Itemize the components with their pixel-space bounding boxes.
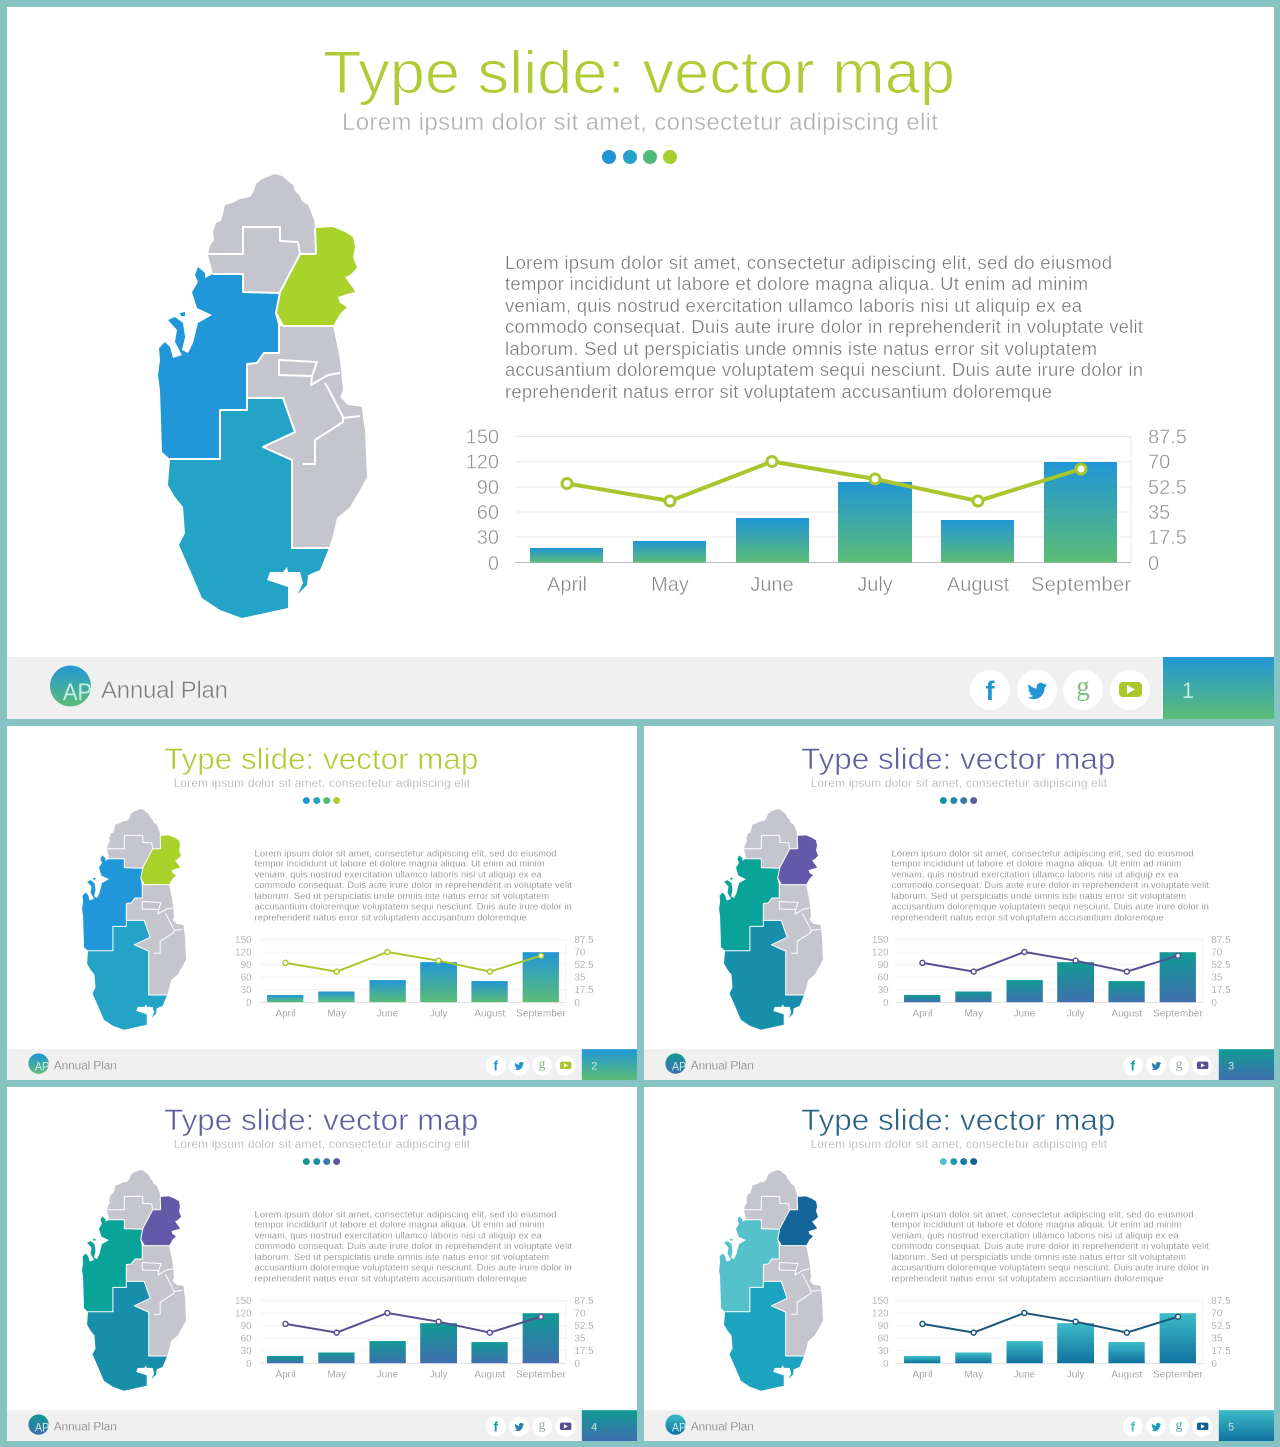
category labels: August xyxy=(474,1369,506,1380)
line markers xyxy=(562,456,1086,506)
combo chart xyxy=(235,1296,594,1380)
right axis labels: 0 xyxy=(574,998,580,1009)
body text: laborum. Sed ut perspiciatis unde omnis iste natus error sit voluptatem xyxy=(892,891,1186,901)
social icons: f xyxy=(1131,1420,1136,1435)
body text: reprehenderit natus error sit voluptatem accusantium doloremque xyxy=(892,912,1164,922)
right axis labels: 17.5 xyxy=(1211,1346,1231,1357)
page number box xyxy=(582,1410,637,1441)
category labels xyxy=(276,1008,567,1019)
left axis labels xyxy=(872,1296,889,1370)
category labels: April xyxy=(913,1008,932,1019)
map of Qatar xyxy=(719,809,823,1030)
category labels: September xyxy=(1153,1369,1204,1380)
right axis labels: 52.5 xyxy=(1211,1321,1231,1332)
right axis labels: 52.5 xyxy=(574,1321,594,1332)
left axis labels: 60 xyxy=(878,1334,889,1345)
category labels: May xyxy=(327,1369,346,1380)
category labels xyxy=(913,1008,1204,1019)
body text xyxy=(255,848,572,922)
category labels: September xyxy=(516,1008,567,1019)
left axis labels xyxy=(235,1296,252,1370)
right axis labels xyxy=(1148,426,1187,575)
subtitle: Lorem ipsum dolor sit amet, consectetur adipiscing elit xyxy=(811,776,1108,790)
page number box xyxy=(1219,1049,1274,1080)
social icons xyxy=(970,670,1150,710)
body text: veniam, quis nostrud exercitation ullamco laboris nisi ut aliquip ex ea xyxy=(255,1231,542,1241)
left axis labels: 90 xyxy=(241,960,252,971)
body text: Lorem ipsum dolor sit amet, consectetur adipiscing elit, sed do eiusmod xyxy=(255,1209,556,1219)
category labels: June xyxy=(1014,1008,1036,1019)
body text: commodo consequat. Duis aute irure dolor in reprehenderit in voluptate velit xyxy=(892,1241,1209,1251)
right axis labels xyxy=(574,1296,594,1370)
body text: commodo consequat. Duis aute irure dolor in reprehenderit in voluptate velit xyxy=(255,1241,572,1251)
dots xyxy=(303,797,340,804)
body text: accusantium doloremque voluptatem sequi nesciunt. Duis aute irure dolor in xyxy=(255,1262,572,1272)
line series xyxy=(567,462,1081,501)
right axis labels: 35 xyxy=(1211,1334,1223,1345)
left axis labels: 120 xyxy=(466,452,499,474)
brand name: Annual Plan xyxy=(691,1059,754,1073)
category labels xyxy=(276,1369,567,1380)
right axis labels: 0 xyxy=(1211,998,1217,1009)
body text: Lorem ipsum dolor sit amet, consectetur adipiscing elit, sed do eiusmod xyxy=(505,252,1112,273)
category labels: August xyxy=(947,574,1010,596)
social icons: g xyxy=(539,1417,546,1432)
category labels: May xyxy=(327,1008,346,1019)
page number box xyxy=(1163,657,1274,719)
left axis labels: 90 xyxy=(878,960,889,971)
body text: accusantium doloremque voluptatem sequi nesciunt. Duis aute irure dolor in xyxy=(892,901,1209,911)
left axis labels xyxy=(235,935,252,1009)
left axis labels: 150 xyxy=(466,426,499,448)
social icons: g xyxy=(539,1056,546,1071)
category labels xyxy=(913,1369,1204,1380)
right axis labels: 52.5 xyxy=(574,960,594,971)
title: Type slide: vector map xyxy=(801,743,1115,776)
right axis labels: 87.5 xyxy=(1148,426,1187,448)
body text: veniam, quis nostrud exercitation ullamco laboris nisi ut aliquip ex ea xyxy=(255,870,542,880)
footer bar xyxy=(7,1410,582,1441)
body text: reprehenderit natus error sit voluptatem accusantium doloremque xyxy=(255,912,527,922)
brand name: Annual Plan xyxy=(54,1059,117,1073)
right axis labels: 70 xyxy=(1211,1308,1223,1319)
page number box: 4 xyxy=(591,1422,597,1434)
social icons: g xyxy=(1176,1056,1183,1071)
left axis labels xyxy=(466,426,499,575)
category labels: May xyxy=(964,1008,983,1019)
social icons: f xyxy=(494,1059,499,1074)
left axis labels: 60 xyxy=(241,973,252,984)
right axis labels: 87.5 xyxy=(1211,1296,1231,1307)
social icons: f xyxy=(494,1420,499,1435)
left axis labels: 90 xyxy=(477,477,499,499)
right axis labels: 17.5 xyxy=(1148,527,1187,549)
social icons: g xyxy=(1076,671,1090,701)
subtitle: Lorem ipsum dolor sit amet, consectetur adipiscing elit xyxy=(811,1137,1108,1151)
bars xyxy=(904,952,1196,1002)
dots xyxy=(602,150,677,164)
right axis labels: 52.5 xyxy=(1148,477,1187,499)
left axis labels: 150 xyxy=(235,1296,252,1307)
line markers xyxy=(920,1310,1181,1335)
category labels: May xyxy=(964,1369,983,1380)
subtitle: Lorem ipsum dolor sit amet, consectetur adipiscing elit xyxy=(174,1137,471,1151)
logo xyxy=(28,1053,49,1074)
title: Type slide: vector map xyxy=(323,39,955,106)
right axis labels: 35 xyxy=(574,1334,586,1345)
body text: veniam, quis nostrud exercitation ullamco laboris nisi ut aliquip ex ea xyxy=(892,870,1179,880)
right axis labels: 70 xyxy=(1211,947,1223,958)
line markers xyxy=(283,949,544,974)
bars xyxy=(267,1313,559,1363)
map of Qatar xyxy=(82,1170,186,1391)
social icons: f xyxy=(1131,1059,1136,1074)
body text: veniam, quis nostrud exercitation ullamco laboris nisi ut aliquip ex ea xyxy=(505,295,1083,316)
line series xyxy=(922,952,1178,972)
map of Qatar xyxy=(82,809,186,1030)
category labels: July xyxy=(1067,1008,1084,1019)
right axis labels: 87.5 xyxy=(1211,935,1231,946)
left axis labels: 150 xyxy=(872,1296,889,1307)
bars xyxy=(904,1313,1196,1363)
page number box: 2 xyxy=(591,1061,597,1073)
combo chart xyxy=(466,426,1187,596)
category labels: May xyxy=(651,574,689,596)
body text: tempor incididunt ut labore et dolore magna aliqua. Ut enim ad minim xyxy=(255,1220,545,1230)
body text: commodo consequat. Duis aute irure dolor in reprehenderit in voluptate velit xyxy=(255,880,572,890)
title: Type slide: vector map xyxy=(801,1104,1115,1137)
right axis labels: 17.5 xyxy=(1211,985,1231,996)
footer bar xyxy=(644,1410,1219,1441)
body text: reprehenderit natus error sit voluptatem accusantium doloremque xyxy=(892,1273,1164,1283)
left axis labels: 0 xyxy=(883,1359,889,1370)
line markers xyxy=(920,949,1181,974)
bars xyxy=(530,462,1117,562)
left axis labels: 0 xyxy=(488,553,499,575)
dots xyxy=(940,797,977,804)
left axis labels: 120 xyxy=(872,947,889,958)
category labels: July xyxy=(430,1369,447,1380)
left axis labels: 30 xyxy=(477,527,499,549)
logo: AP xyxy=(672,1421,686,1435)
right axis labels: 70 xyxy=(1148,452,1170,474)
left axis labels: 150 xyxy=(872,935,889,946)
page number box xyxy=(582,1049,637,1080)
social icons xyxy=(486,1056,575,1076)
category labels: April xyxy=(276,1008,295,1019)
right axis labels: 0 xyxy=(1148,553,1159,575)
logo xyxy=(665,1414,686,1435)
body text: commodo consequat. Duis aute irure dolor in reprehenderit in voluptate velit xyxy=(892,880,1209,890)
line series xyxy=(922,1313,1178,1333)
body text: veniam, quis nostrud exercitation ullamco laboris nisi ut aliquip ex ea xyxy=(892,1231,1179,1241)
combo chart xyxy=(872,1296,1231,1380)
left axis labels: 150 xyxy=(235,935,252,946)
right axis labels: 17.5 xyxy=(574,1346,594,1357)
dots xyxy=(940,1158,977,1165)
category labels: April xyxy=(547,574,587,596)
category labels: September xyxy=(516,1369,567,1380)
category labels: September xyxy=(1031,574,1131,596)
category labels: June xyxy=(377,1008,399,1019)
body text: Lorem ipsum dolor sit amet, consectetur adipiscing elit, sed do eiusmod xyxy=(892,848,1193,858)
panel: slide 5 xyxy=(644,1087,1274,1441)
body text xyxy=(255,1209,572,1283)
left axis labels: 30 xyxy=(878,985,889,996)
logo: AP xyxy=(672,1060,686,1074)
right axis labels: 52.5 xyxy=(1211,960,1231,971)
right axis labels: 17.5 xyxy=(574,985,594,996)
body text: accusantium doloremque voluptatem sequi nesciunt. Duis aute irure dolor in xyxy=(255,901,572,911)
title: Type slide: vector map xyxy=(164,743,478,776)
left axis labels: 30 xyxy=(241,1346,252,1357)
panel: slide 1 xyxy=(7,7,1274,719)
right axis labels: 35 xyxy=(1211,973,1223,984)
left axis labels: 60 xyxy=(878,973,889,984)
page number box: 1 xyxy=(1182,678,1194,703)
category labels: August xyxy=(474,1008,506,1019)
body text: tempor incididunt ut labore et dolore magna aliqua. Ut enim ad minim xyxy=(892,1220,1182,1230)
body text xyxy=(892,1209,1209,1283)
left axis labels: 120 xyxy=(235,947,252,958)
body text: tempor incididunt ut labore et dolore magna aliqua. Ut enim ad minim xyxy=(505,273,1088,294)
logo xyxy=(28,1414,49,1435)
panel: slide 4 xyxy=(7,1087,637,1441)
body text: accusantium doloremque voluptatem sequi nesciunt. Duis aute irure dolor in xyxy=(505,359,1143,380)
page number box xyxy=(1219,1410,1274,1441)
body text xyxy=(892,848,1209,922)
category labels: August xyxy=(1111,1008,1143,1019)
category labels: June xyxy=(1014,1369,1036,1380)
left axis labels: 90 xyxy=(878,1321,889,1332)
right axis labels: 70 xyxy=(574,1308,586,1319)
right axis labels: 0 xyxy=(574,1359,580,1370)
right axis labels: 35 xyxy=(1148,502,1170,524)
line series xyxy=(285,952,541,972)
left axis labels: 60 xyxy=(477,502,499,524)
right axis labels xyxy=(574,935,594,1009)
logo xyxy=(50,666,92,706)
body text: laborum. Sed ut perspiciatis unde omnis iste natus error sit voluptatem xyxy=(255,891,549,901)
body text: reprehenderit natus error sit voluptatem accusantium doloremque xyxy=(505,381,1052,402)
body text: commodo consequat. Duis aute irure dolor in reprehenderit in voluptate velit xyxy=(505,316,1143,337)
social icons xyxy=(1123,1056,1212,1076)
right axis labels: 0 xyxy=(1211,1359,1217,1370)
logo xyxy=(665,1053,686,1074)
body text: laborum. Sed ut perspiciatis unde omnis iste natus error sit voluptatem xyxy=(505,338,1097,359)
left axis labels: 60 xyxy=(241,1334,252,1345)
map of Qatar xyxy=(158,174,367,618)
line markers xyxy=(283,1310,544,1335)
brand name: Annual Plan xyxy=(54,1420,117,1434)
body text: reprehenderit natus error sit voluptatem accusantium doloremque xyxy=(255,1273,527,1283)
right axis labels: 87.5 xyxy=(574,935,594,946)
title: Type slide: vector map xyxy=(164,1104,478,1137)
right axis labels: 35 xyxy=(574,973,586,984)
body text: tempor incididunt ut labore et dolore magna aliqua. Ut enim ad minim xyxy=(255,859,545,869)
left axis labels: 0 xyxy=(883,998,889,1009)
page number box: 3 xyxy=(1228,1061,1234,1073)
body text: laborum. Sed ut perspiciatis unde omnis iste natus error sit voluptatem xyxy=(255,1252,549,1262)
body text: accusantium doloremque voluptatem sequi nesciunt. Duis aute irure dolor in xyxy=(892,1262,1209,1272)
right axis labels xyxy=(1211,1296,1231,1370)
left axis labels: 120 xyxy=(235,1308,252,1319)
left axis labels: 120 xyxy=(872,1308,889,1319)
brand name: Annual Plan xyxy=(691,1420,754,1434)
body text: Lorem ipsum dolor sit amet, consectetur adipiscing elit, sed do eiusmod xyxy=(892,1209,1193,1219)
footer bar xyxy=(7,1049,582,1080)
social icons xyxy=(1123,1417,1212,1437)
social icons xyxy=(486,1417,575,1437)
left axis labels xyxy=(872,935,889,1009)
body text: laborum. Sed ut perspiciatis unde omnis iste natus error sit voluptatem xyxy=(892,1252,1186,1262)
left axis labels: 0 xyxy=(246,1359,252,1370)
social icons: g xyxy=(1176,1417,1183,1432)
category labels: June xyxy=(750,574,794,596)
footer bar xyxy=(644,1049,1219,1080)
logo: AP xyxy=(35,1421,49,1435)
map of Qatar xyxy=(719,1170,823,1391)
category labels: July xyxy=(857,574,893,596)
body text xyxy=(505,252,1143,402)
category labels: April xyxy=(276,1369,295,1380)
body text: tempor incididunt ut labore et dolore magna aliqua. Ut enim ad minim xyxy=(892,859,1182,869)
bars xyxy=(267,952,559,1002)
logo: AP xyxy=(63,679,92,706)
category labels xyxy=(547,574,1131,596)
category labels: August xyxy=(1111,1369,1143,1380)
brand name: Annual Plan xyxy=(101,677,228,704)
category labels: July xyxy=(430,1008,447,1019)
subtitle: Lorem ipsum dolor sit amet, consectetur adipiscing elit xyxy=(174,776,471,790)
right axis labels: 70 xyxy=(574,947,586,958)
body text: Lorem ipsum dolor sit amet, consectetur adipiscing elit, sed do eiusmod xyxy=(255,848,556,858)
right axis labels xyxy=(1211,935,1231,1009)
left axis labels: 30 xyxy=(878,1346,889,1357)
left axis labels: 90 xyxy=(241,1321,252,1332)
category labels: September xyxy=(1153,1008,1204,1019)
panel: slide 3 xyxy=(644,726,1274,1080)
dots xyxy=(303,1158,340,1165)
footer bar xyxy=(7,657,1163,719)
combo chart xyxy=(235,935,594,1019)
subtitle: Lorem ipsum dolor sit amet, consectetur adipiscing elit xyxy=(342,109,938,136)
left axis labels: 0 xyxy=(246,998,252,1009)
right axis labels: 87.5 xyxy=(574,1296,594,1307)
logo: AP xyxy=(35,1060,49,1074)
left axis labels: 30 xyxy=(241,985,252,996)
combo chart xyxy=(872,935,1231,1019)
social icons: f xyxy=(986,676,996,706)
page number box: 5 xyxy=(1228,1422,1234,1434)
category labels: June xyxy=(377,1369,399,1380)
category labels: April xyxy=(913,1369,932,1380)
category labels: July xyxy=(1067,1369,1084,1380)
line series xyxy=(285,1313,541,1333)
panel: slide 2 xyxy=(7,726,637,1080)
